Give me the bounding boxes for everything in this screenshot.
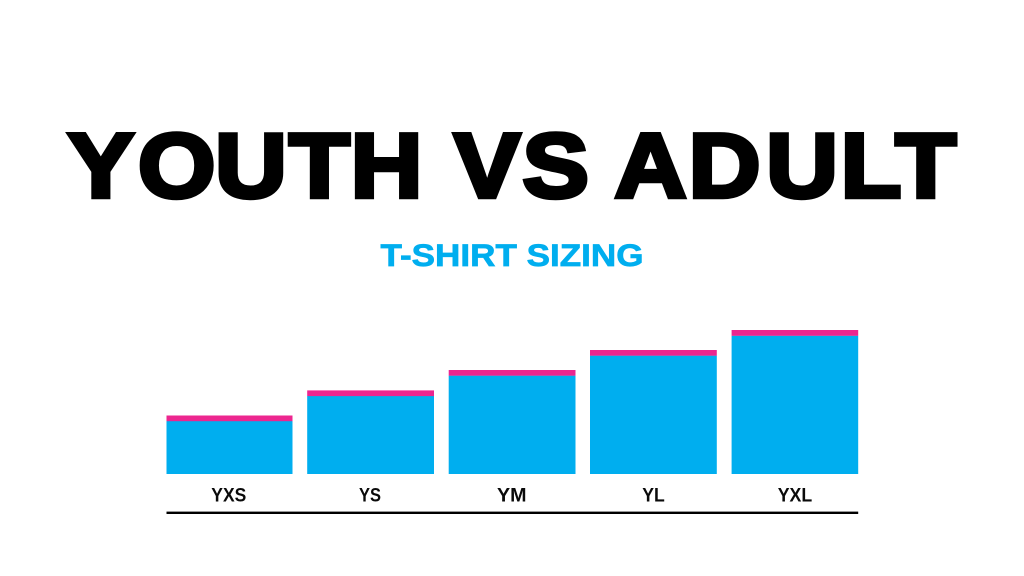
title: YOUTH VS ADULT (68, 116, 956, 217)
bar: YS (307, 390, 434, 474)
label: YL: YL (642, 485, 665, 507)
axis line (166, 512, 858, 514)
bar: YM (449, 370, 576, 474)
subtitle: T-SHIRT SIZING (380, 237, 644, 273)
label: YXS: YXS (211, 485, 246, 507)
bar chart (166, 330, 858, 514)
label: YM: YM (497, 485, 526, 507)
bar: YXL (732, 330, 858, 474)
bar: YXS (166, 416, 292, 474)
label: YS: YS (359, 485, 381, 507)
label: YXL: YXL (778, 485, 812, 507)
bar: YL (590, 350, 717, 474)
